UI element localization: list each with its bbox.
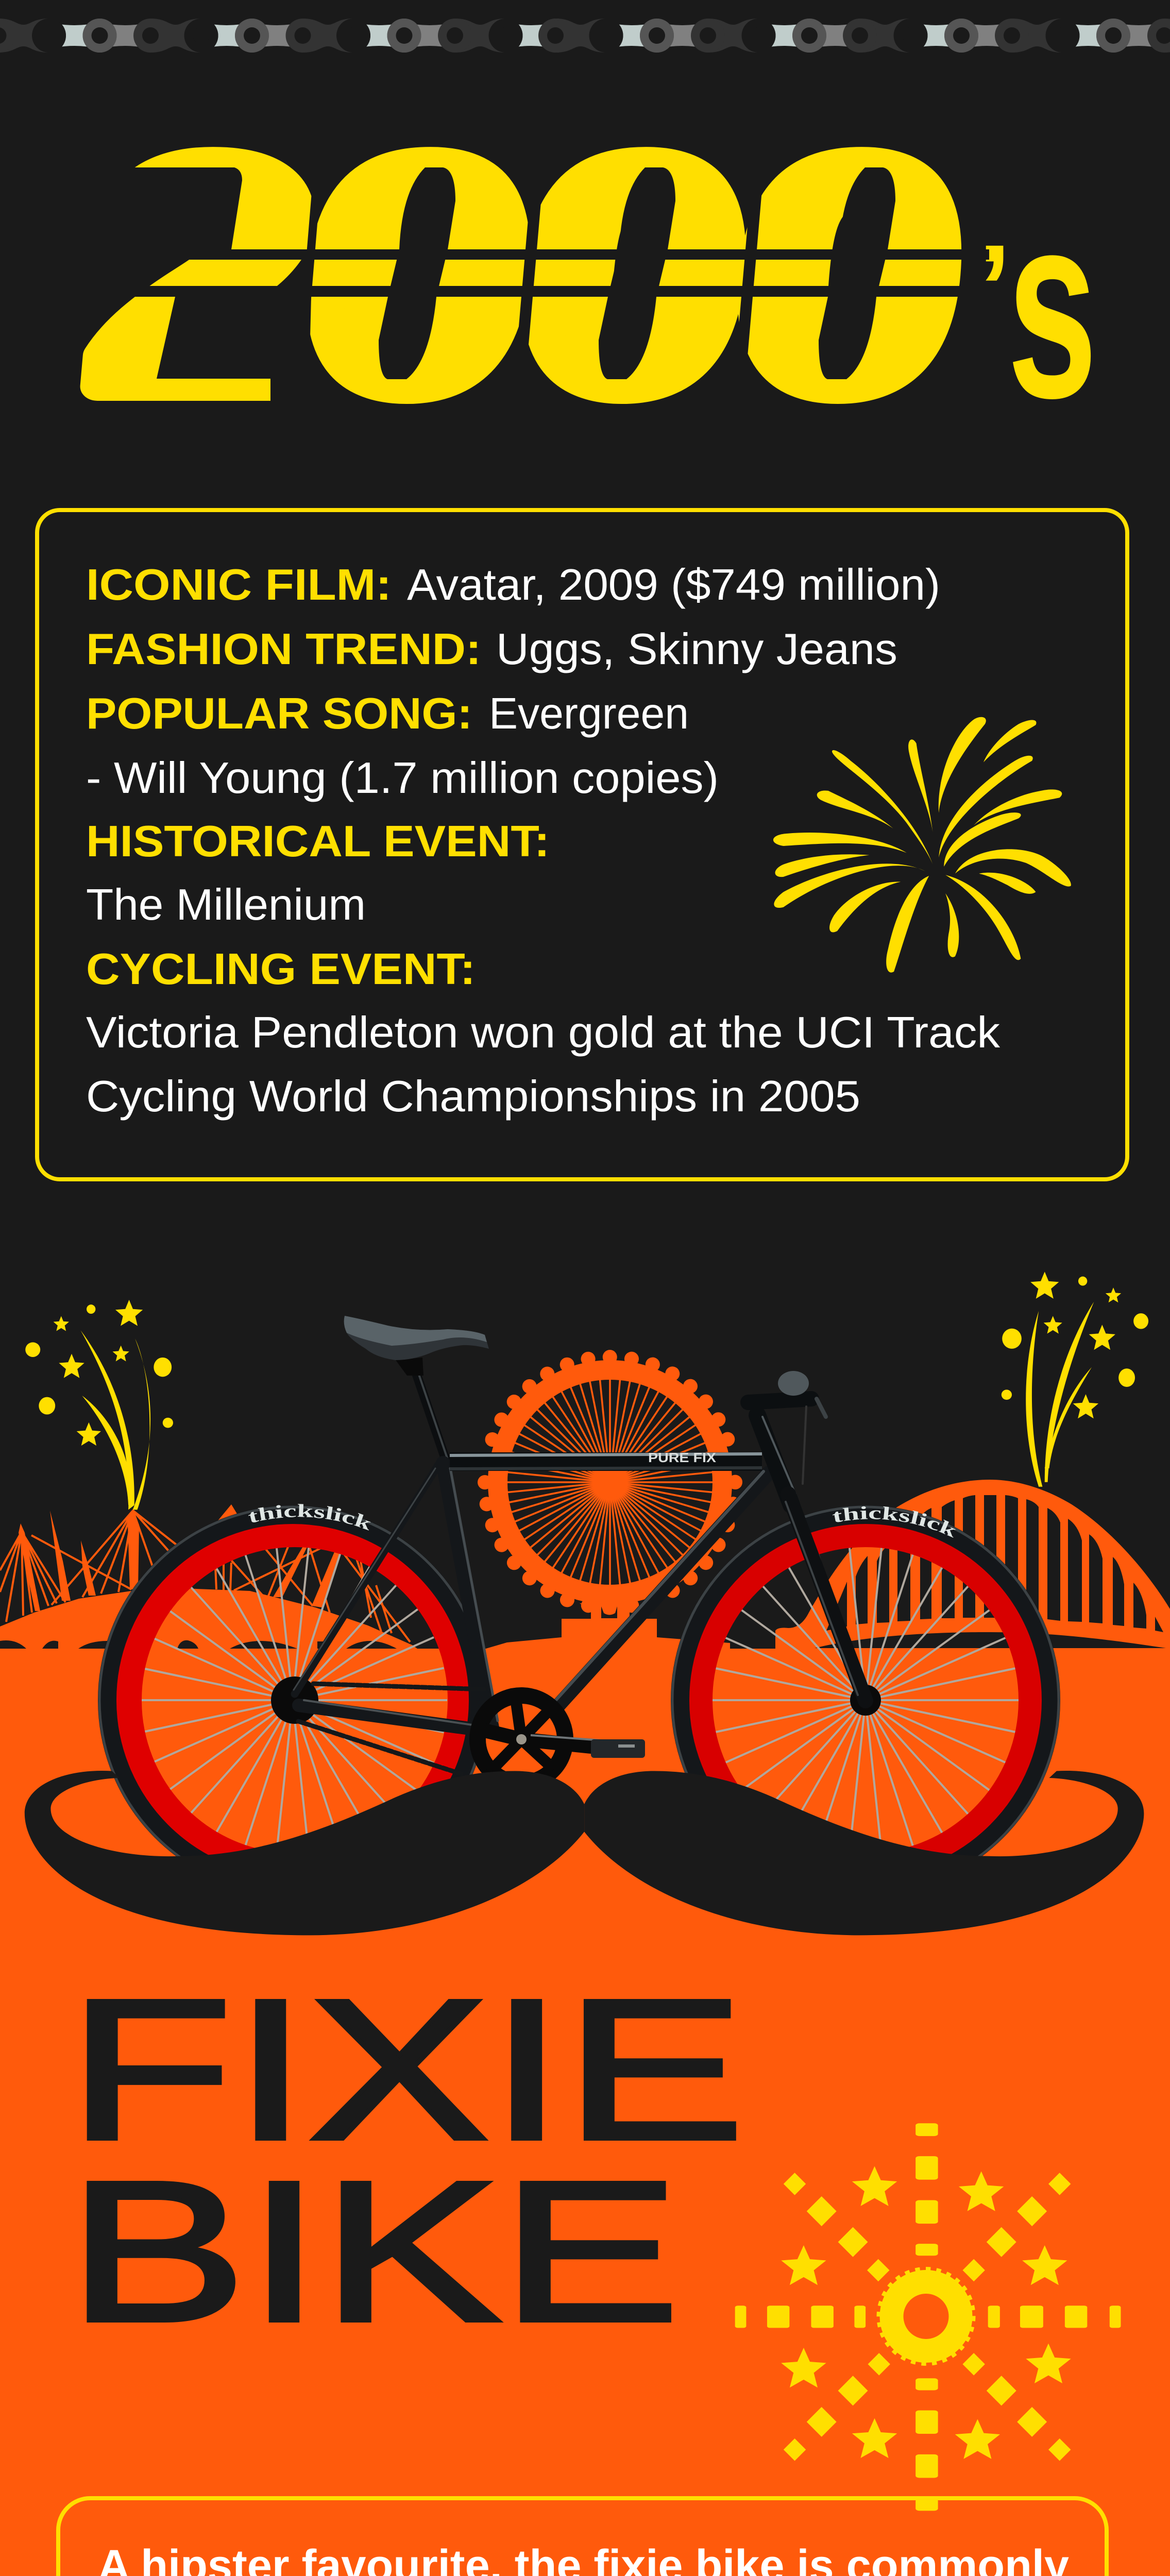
firework: small left <box>25 1300 173 1510</box>
tyre label front: thickslick <box>833 1506 956 1538</box>
top tube brand: PURE FIX <box>648 1450 717 1465</box>
facts: iconic film <box>86 561 940 609</box>
background: orange lower section <box>0 1649 1170 2576</box>
title: 2000's: 2000 <box>79 96 973 453</box>
facts: cycling event: Cycling World Championships in 2005 <box>86 1072 860 1121</box>
title: 2000's: ’ <box>977 219 1012 357</box>
facts: popular song: - Will Young (1.7 million copies) <box>86 754 719 803</box>
front wheel <box>671 1505 1060 1856</box>
tyre label rear: thickslick <box>248 1504 371 1530</box>
background: dark upper section <box>0 0 1170 1649</box>
facts: fashion trend <box>86 625 897 674</box>
facts: iconic film: Avatar, 2009 ($749 million) <box>407 561 940 609</box>
saddle <box>344 1316 489 1376</box>
facts: cycling event: CYCLING EVENT: <box>86 945 476 994</box>
heading: FIXIE BIKE: BIKE <box>67 2140 680 2363</box>
heading: FIXIE BIKE <box>67 1958 745 2363</box>
icon: yellow firework <box>773 717 1071 973</box>
facts: popular song: Evergreen <box>489 689 689 738</box>
top bike chain <box>0 19 1170 53</box>
panel: iconic facts <box>37 510 1127 1179</box>
facts: cycling event <box>86 945 1001 1121</box>
frame tubes <box>294 1370 866 1774</box>
facts: historical event: The Millenium <box>86 880 366 929</box>
facts: fashion trend: FASHION TREND: <box>86 625 481 674</box>
chainring and crank <box>478 1695 645 1783</box>
brake lever and grip <box>778 1371 809 1396</box>
arch bridge <box>775 1480 1170 1649</box>
facts: popular song <box>86 689 719 803</box>
heading: FIXIE BIKE: FIXIE <box>67 1958 745 2181</box>
facts: historical event: HISTORICAL EVENT: <box>86 817 550 866</box>
icon: gear sunburst firework <box>735 2123 1121 2511</box>
skyline: dome and masts <box>0 1504 417 1649</box>
facts: fashion trend: Uggs, Skinny Jeans <box>496 625 897 674</box>
firework: small right <box>1002 1272 1148 1487</box>
facts: iconic film: ICONIC FILM: <box>86 561 392 609</box>
bicycle <box>79 1316 1080 1914</box>
facts: popular song: POPULAR SONG: <box>86 689 472 738</box>
facts: historical event <box>86 817 550 929</box>
moustache <box>25 1771 1144 1935</box>
facts: cycling event: Victoria Pendleton won gold at the UCI Track <box>86 1008 1001 1057</box>
ferris wheel <box>485 1357 735 1649</box>
rear wheel <box>98 1504 481 1856</box>
title: 2000's: s <box>1007 159 1097 453</box>
